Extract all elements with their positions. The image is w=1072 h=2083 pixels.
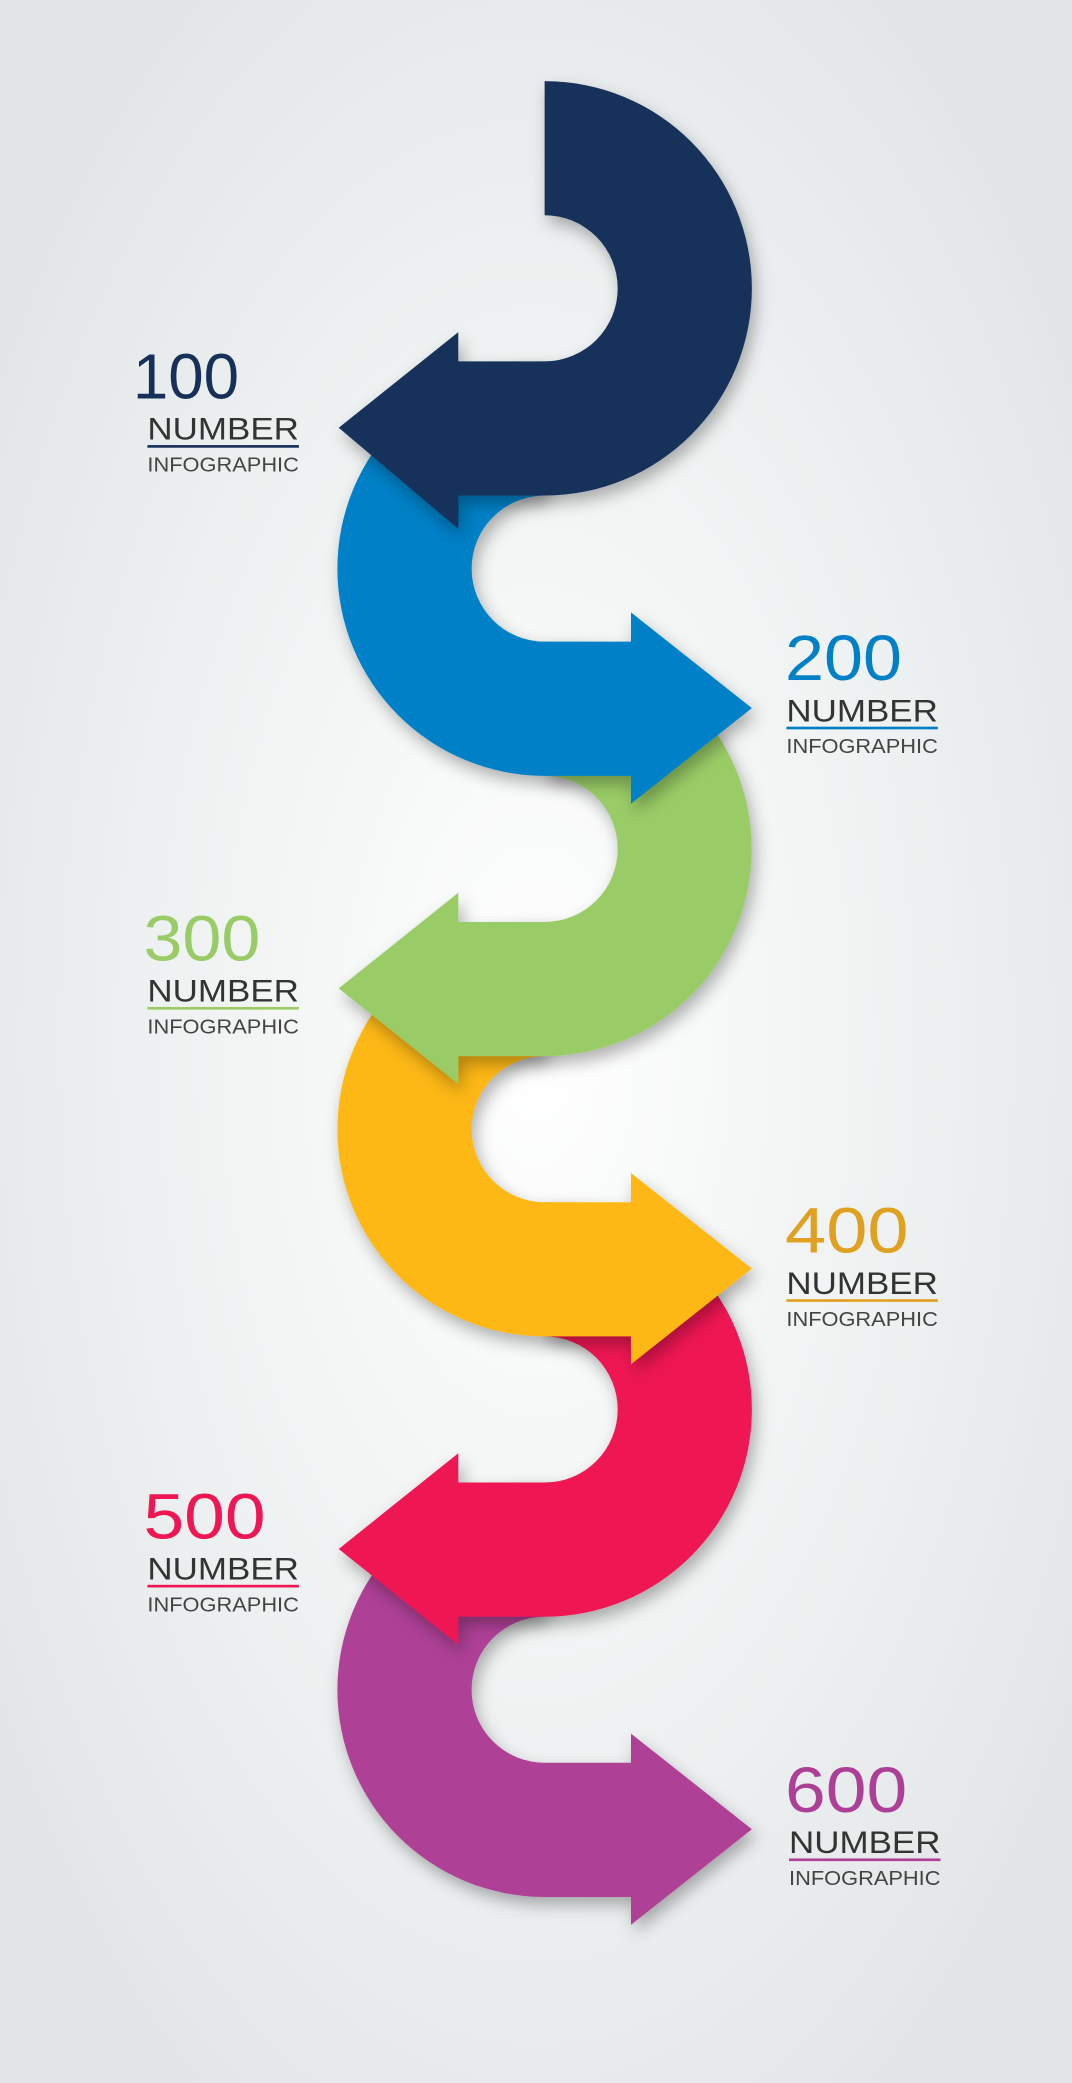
label 300 xyxy=(143,902,299,1039)
label 200: 200 xyxy=(785,622,902,694)
label 100: NUMBER xyxy=(147,411,299,447)
label 200: NUMBER xyxy=(786,692,938,728)
label 400: NUMBER xyxy=(786,1265,938,1301)
arrow 4: yellow xyxy=(337,922,752,1364)
label 300: 300 xyxy=(143,902,260,974)
label 500: NUMBER xyxy=(147,1550,299,1586)
label 400: INFOGRAPHIC xyxy=(786,1309,938,1331)
arrow 2: blue xyxy=(337,361,752,804)
label 100: 100 xyxy=(133,341,239,413)
label 600: 600 xyxy=(785,1754,907,1826)
label 600: INFOGRAPHIC xyxy=(789,1868,940,1890)
label 500 xyxy=(143,1480,299,1616)
label 500: INFOGRAPHIC xyxy=(147,1594,299,1616)
arrow 3: green xyxy=(339,642,752,1084)
label 100: INFOGRAPHIC xyxy=(147,455,299,477)
label 200 xyxy=(785,622,938,758)
arrow 5: red xyxy=(339,1202,752,1645)
label 600 xyxy=(785,1754,940,1890)
label 200: INFOGRAPHIC xyxy=(786,736,938,758)
label 500: 500 xyxy=(143,1480,266,1552)
label 300: NUMBER xyxy=(147,973,299,1009)
arrow 6: purple xyxy=(337,1483,752,1925)
arrow 1: navy xyxy=(339,81,752,529)
label 300: INFOGRAPHIC xyxy=(147,1017,299,1039)
label 400: 400 xyxy=(785,1195,909,1267)
label 400 xyxy=(785,1195,938,1331)
label 600: NUMBER xyxy=(789,1824,940,1860)
label 100 xyxy=(133,341,299,477)
